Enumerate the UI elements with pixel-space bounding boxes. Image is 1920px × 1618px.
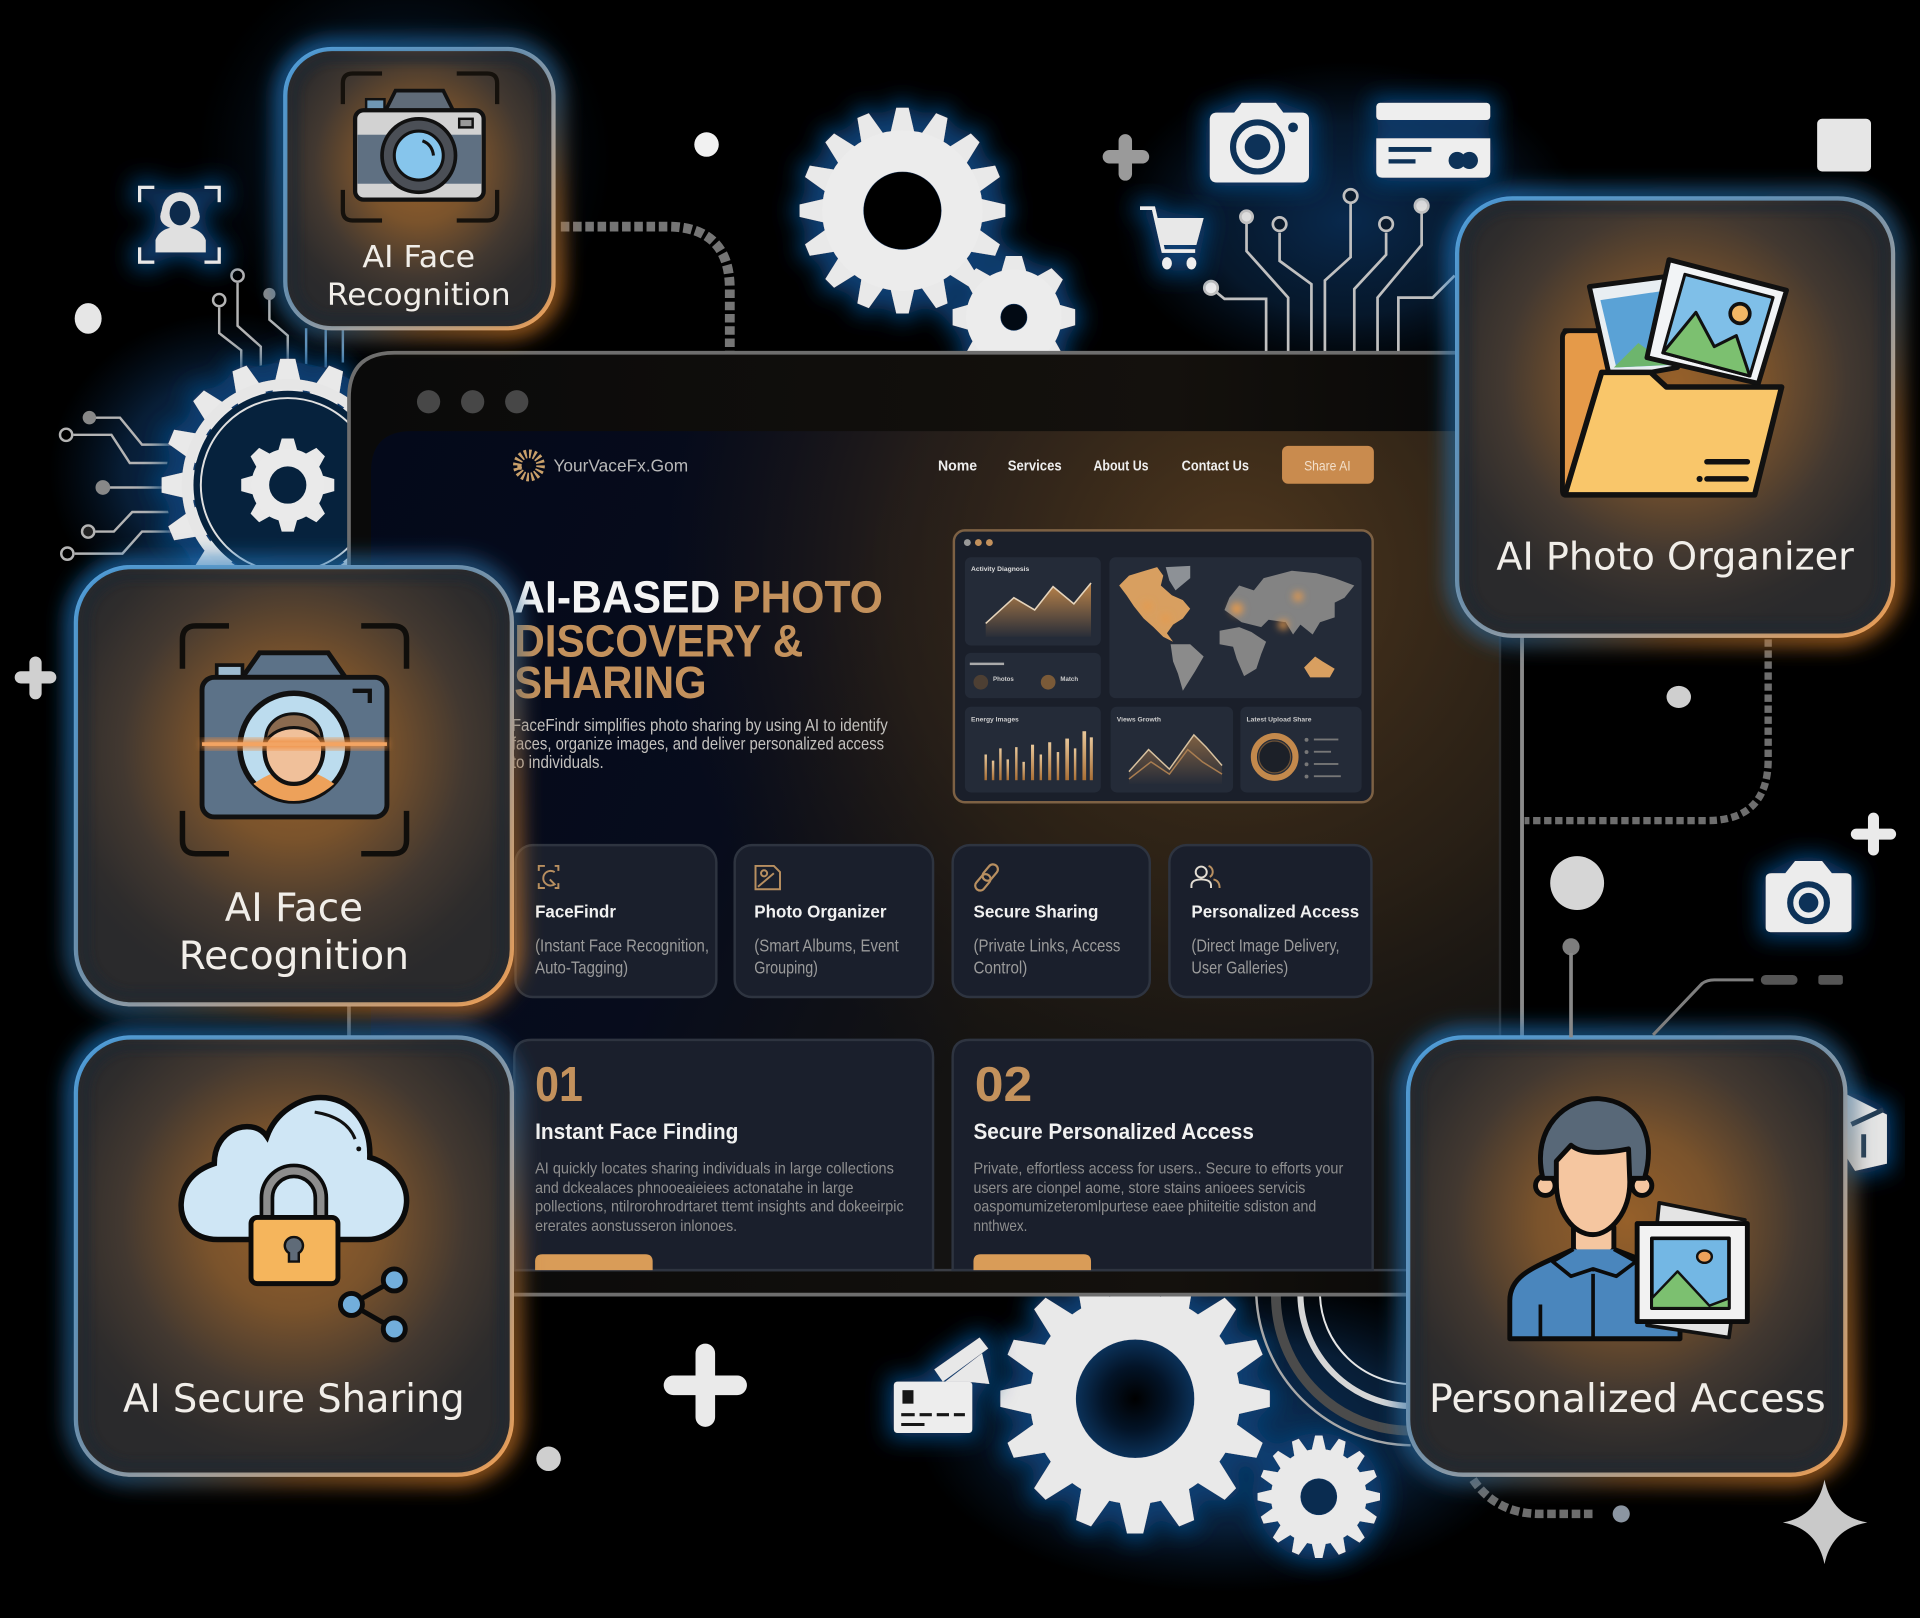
navigation: About Us <box>1093 458 1149 474</box>
icon: camera <box>343 73 497 220</box>
step card 02: 02 <box>975 1058 1032 1112</box>
feature card: Personalized Access: (Direct Image Delivery, <box>1191 936 1340 956</box>
panel: Personalized Access <box>1408 1037 1845 1475</box>
hero heading: SHARING <box>514 657 707 708</box>
world map panel <box>1109 557 1362 698</box>
feature card: Personalized Access: Personalized Access <box>1191 901 1359 921</box>
icon: isometric box <box>1843 1093 1887 1171</box>
icon: camera face scan <box>182 626 407 854</box>
step card 02: users are cionpel aome, store stains anioees servicis <box>973 1180 1305 1197</box>
panel: Personalized Access: Personalized Access <box>1429 1377 1826 1422</box>
dashed connector: bottom right <box>1473 1480 1594 1514</box>
line chart panel <box>1111 707 1233 792</box>
gears: bottom center <box>1000 1264 1380 1558</box>
feature card: FaceFindr: FaceFindr <box>535 901 616 921</box>
logo: YourVaceFx.Gom <box>553 456 688 476</box>
donut panel: Latest Upload Share <box>1247 716 1312 723</box>
line chart panel: Views Growth <box>1117 716 1161 723</box>
icon: white camera right <box>1766 861 1851 932</box>
icon: face scan top left <box>140 187 219 262</box>
panel: AI Face Recognition small: Recognition <box>327 278 511 313</box>
hero paragraph: faces, organize images, and deliver personalized access <box>512 734 884 754</box>
hero paragraph <box>512 715 888 772</box>
outer ring gear <box>162 359 414 611</box>
panel: AI Face Recognition large: Recognition <box>179 934 409 979</box>
dashed connector: right side <box>1524 639 1768 821</box>
feature card: Secure Sharing: Control) <box>973 958 1027 978</box>
feature card: FaceFindr: (Instant Face Recognition, <box>535 936 709 956</box>
feature card: Photo Organizer: Grouping) <box>754 958 818 978</box>
icon: credit card top <box>1376 103 1490 178</box>
step card 02 <box>953 1040 1373 1270</box>
stats panel: Photos <box>993 676 1014 683</box>
stats panel <box>965 653 1101 698</box>
feature card: Photo Organizer <box>735 845 933 997</box>
feature card: Secure Sharing: Secure Sharing <box>973 901 1098 921</box>
panel: AI Face Recognition large: AI Face <box>225 886 363 931</box>
icon: folder with photos <box>1562 260 1787 495</box>
icon: credit cards bottom <box>894 1338 989 1433</box>
step card 01: ererates aonstusseron inlonoes. <box>535 1218 737 1235</box>
decorative arcs: bottom right <box>1256 1296 1411 1445</box>
website screen <box>371 431 1522 1270</box>
area chart panel <box>965 557 1101 645</box>
area chart panel: Activity Diagnosis <box>971 566 1030 573</box>
step card 01 <box>514 1040 933 1270</box>
donut panel <box>1240 707 1362 792</box>
step card 01: AI quickly locates sharing individuals in large collections <box>535 1160 894 1177</box>
gear assembly: left <box>162 359 414 611</box>
panel: AI Secure Sharing <box>76 1037 512 1475</box>
panel: AI Photo Organizer <box>1457 198 1893 636</box>
dashboard mockup <box>954 530 1373 802</box>
feature card: Secure Sharing: (Private Links, Access <box>973 936 1120 956</box>
step card 02: Private, effortless access for users.. Secure to efforts your <box>973 1160 1344 1177</box>
dashed connector: top left <box>561 227 730 353</box>
step card 01: pollections, ntilrorohrodrtaret ttemt insights and dokeeirpic <box>535 1198 904 1215</box>
feature card: Personalized Access: User Galleries) <box>1191 958 1288 978</box>
feature card: FaceFindr: Auto-Tagging) <box>535 958 628 978</box>
navigation <box>938 458 1249 474</box>
step card 01: and dckealaces phnooeaieiees actonatahe in large <box>535 1180 854 1197</box>
step card 01: 01 <box>535 1058 583 1112</box>
icon: people <box>1191 866 1220 888</box>
feature card: Personalized Access <box>1169 845 1371 997</box>
hero paragraph: to individuals. <box>512 752 604 772</box>
feature card: Secure Sharing <box>953 845 1150 997</box>
step card 02: oaspomumizeteromlpurtese eaee phiiteitie sdiston and <box>973 1198 1316 1215</box>
right frame rail <box>1521 636 1524 1037</box>
browser frame <box>349 353 1522 1295</box>
icon: white camera top <box>1210 103 1309 182</box>
feature card: Photo Organizer: Photo Organizer <box>754 901 887 921</box>
icon: shopping cart <box>1140 208 1204 269</box>
window dots <box>417 390 528 413</box>
gears: top center <box>800 108 1075 378</box>
bar chart panel: Energy Images <box>971 716 1019 723</box>
navigation: Contact Us <box>1182 458 1249 474</box>
icon: person with photo <box>1510 1099 1747 1339</box>
nav button <box>1282 446 1374 484</box>
icon: cloud lock share <box>181 1097 407 1340</box>
step card 02: nnthwex. <box>973 1218 1027 1235</box>
circuit traces: top right <box>1204 189 1455 353</box>
hero heading: AI-BASED PHOTO <box>514 571 883 622</box>
step card 01: Instant Face Finding <box>535 1119 738 1144</box>
hero paragraph: FaceFindr simplifies photo sharing by using AI to identify <box>512 715 888 735</box>
logo <box>517 454 688 477</box>
nav button: Share AI <box>1304 457 1351 473</box>
inner small gear <box>241 438 334 532</box>
step card 02: Secure Personalized Access <box>973 1119 1254 1144</box>
navigation: Nome <box>938 458 977 474</box>
icon: chain link <box>973 862 1000 893</box>
panel: AI Face Recognition small: AI Face <box>362 240 475 275</box>
hero heading <box>514 571 883 708</box>
bar chart panel <box>965 707 1101 792</box>
navigation: Services <box>1008 458 1062 474</box>
panel: AI Secure Sharing: AI Secure Sharing <box>123 1377 465 1422</box>
panel: AI Photo Organizer: AI Photo Organizer <box>1496 535 1854 579</box>
feature card: FaceFindr <box>516 845 716 997</box>
hero heading: DISCOVERY & <box>514 616 803 667</box>
panel: AI Face Recognition large <box>76 567 512 1004</box>
icon: photo <box>756 866 780 889</box>
icon: face scan <box>539 866 558 888</box>
circuit traces: left gear <box>60 269 343 560</box>
stats panel: Match <box>1060 676 1078 683</box>
panel: AI Face Recognition small <box>285 49 553 328</box>
feature card: Photo Organizer: (Smart Albums, Event <box>754 936 899 956</box>
